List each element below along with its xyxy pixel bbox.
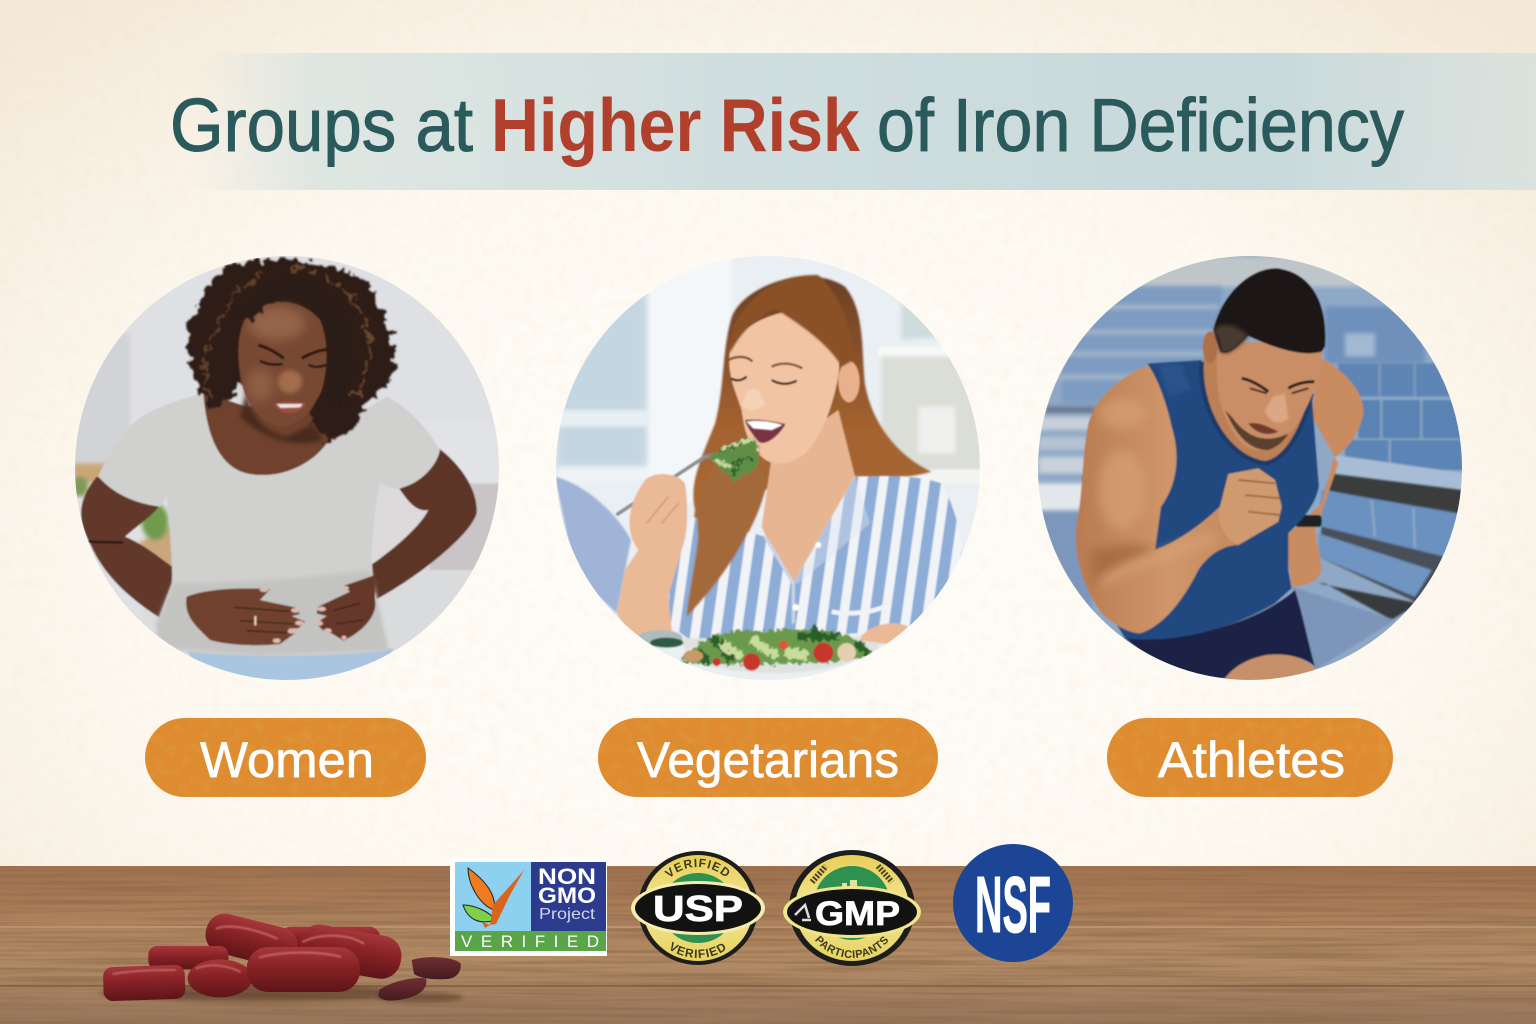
badge: Non-GMO Project Verified	[450, 857, 607, 956]
neck	[762, 410, 855, 583]
badge: GMP	[783, 850, 921, 966]
title	[170, 83, 1404, 167]
badge: NSF: NSF	[975, 860, 1051, 949]
label: Athletes: Athletes	[1158, 732, 1345, 788]
badge: NSF	[953, 844, 1073, 962]
photo: woman eating salad	[556, 256, 980, 680]
badge: USP verified	[631, 851, 765, 965]
hands	[186, 575, 375, 645]
badge: USP verified: VERIFIED	[670, 942, 726, 958]
salad on fork	[708, 437, 759, 480]
head	[1203, 268, 1325, 450]
badge: Non-GMO Project Verified: GMO	[538, 883, 596, 908]
hair front strand	[687, 457, 765, 617]
face	[238, 302, 328, 427]
bright room background	[556, 256, 980, 680]
title: of Iron Deficiency	[877, 83, 1404, 167]
badge: GMP: PARTICIPANTS	[815, 936, 888, 958]
badge: Non-GMO Project Verified: VERIFIED	[461, 932, 599, 951]
butterfly icon	[463, 868, 524, 928]
neck	[1201, 347, 1312, 462]
title band	[190, 53, 1536, 190]
blue tank top	[1082, 360, 1319, 640]
hair front curls	[204, 268, 369, 397]
jeans	[187, 648, 393, 683]
striped blouse	[669, 475, 962, 643]
badge: Non-GMO Project Verified: NON	[538, 864, 596, 889]
title: Higher Risk	[491, 83, 860, 167]
t-shirt	[98, 393, 440, 656]
hand with fork	[617, 453, 722, 645]
label: Women: Women	[200, 732, 374, 788]
arms	[80, 448, 478, 618]
label: Women	[145, 718, 426, 797]
hair back	[187, 259, 397, 440]
wooden table	[0, 866, 1536, 1024]
thigh	[1225, 654, 1318, 683]
label: Athletes	[1107, 718, 1393, 797]
label: Vegetarians: Vegetarians	[637, 732, 899, 788]
label: Vegetarians	[598, 718, 938, 797]
long hair	[692, 276, 932, 532]
right hand	[861, 623, 908, 645]
iron supplement tablets	[100, 910, 463, 1003]
neck and chest	[201, 392, 330, 476]
photo: running athlete	[1038, 256, 1462, 680]
far arm	[1285, 357, 1363, 587]
badge: Non-GMO Project Verified: Project	[539, 906, 596, 923]
badge: USP verified: VERIFIED	[664, 858, 730, 876]
muscular near arm	[1076, 365, 1282, 633]
photo: woman with stomach pain	[75, 256, 499, 680]
shorts	[1125, 590, 1315, 678]
stadium background	[1038, 256, 1462, 678]
title: Groups at	[170, 83, 473, 167]
badge: USP verified: USP	[653, 888, 743, 929]
badge: GMP: GMP	[815, 895, 900, 933]
room background	[75, 256, 499, 657]
salad plate	[637, 627, 882, 673]
face	[728, 275, 860, 464]
